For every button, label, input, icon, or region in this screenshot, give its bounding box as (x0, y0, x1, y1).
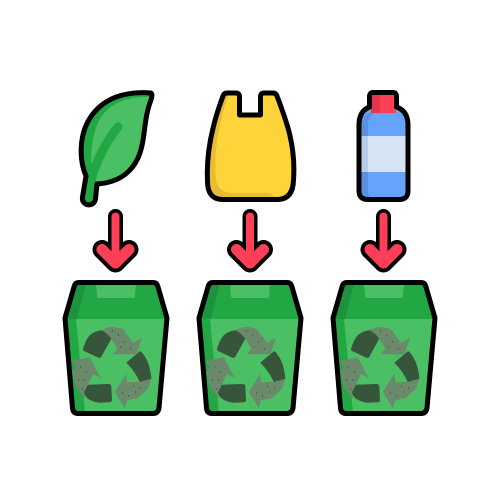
icon: recycling bin for leaf (65, 282, 167, 414)
arrow: bag to bin (236, 216, 264, 263)
icon: water bottle (359, 92, 408, 200)
arrow: bottle to bin (370, 216, 397, 263)
icon: yellow plastic bag (207, 93, 294, 200)
icon: recycling bin for bag (199, 282, 301, 414)
icon: green leaf (81, 93, 152, 205)
icon: recycling bin for bottle (333, 282, 435, 414)
arrow: leaf to bin (102, 216, 129, 263)
